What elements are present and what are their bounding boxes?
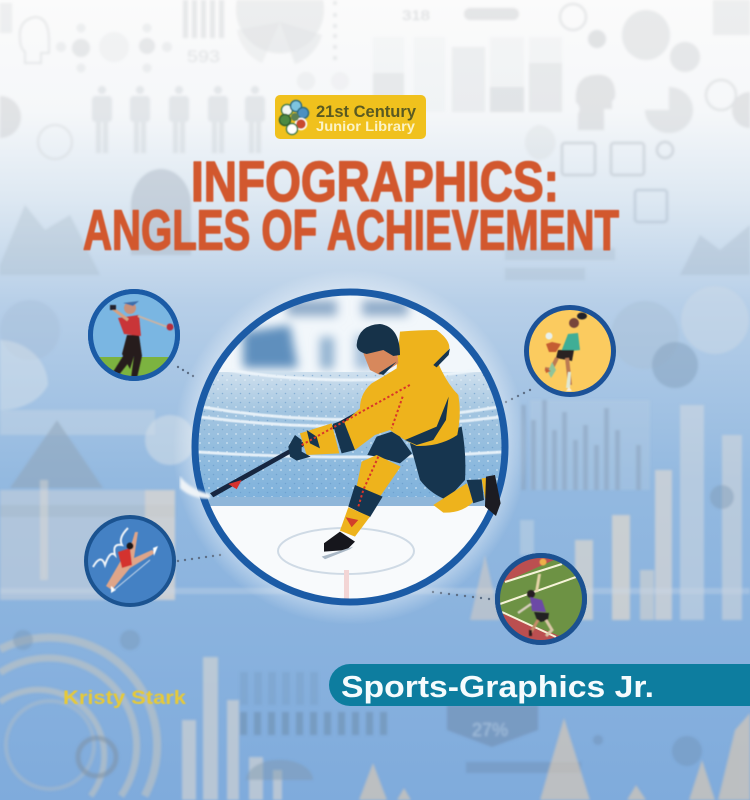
forearm and glove xyxy=(300,423,339,455)
background: top grey charts xyxy=(0,0,750,255)
stands xyxy=(190,372,510,502)
face xyxy=(363,345,398,375)
ice xyxy=(208,497,486,506)
background: bottom shapes xyxy=(0,630,750,800)
background: bottom shapes: 27% xyxy=(472,720,508,740)
logo text: Junior Library: Junior Library xyxy=(316,118,415,134)
circle border xyxy=(195,292,505,602)
ice markings xyxy=(278,528,414,574)
ribbon xyxy=(93,528,128,567)
background: mid left shapes xyxy=(0,205,195,600)
golfer figure xyxy=(110,301,174,378)
logo badge xyxy=(275,95,426,139)
golfer icon circle xyxy=(88,289,180,387)
main circle: hockey scene xyxy=(180,288,510,611)
series banner xyxy=(329,664,750,706)
title line 1: INFOGRAPHICS: xyxy=(191,150,559,214)
sleeve band xyxy=(333,420,355,453)
connector dots xyxy=(177,366,531,600)
angle dotted lines xyxy=(302,384,412,507)
volleyball icon circle xyxy=(524,305,616,397)
background: mid right shapes xyxy=(0,225,750,620)
stadium lights xyxy=(243,300,408,369)
white stick blade xyxy=(180,476,211,499)
tennis ball xyxy=(540,558,546,566)
connector: golf xyxy=(177,366,194,377)
skate xyxy=(324,532,355,552)
gymnast icon circle xyxy=(84,515,176,607)
author name: Kristy Stark xyxy=(63,688,186,709)
connector: tennis xyxy=(432,591,490,600)
tennis icon circle xyxy=(490,545,588,660)
title xyxy=(83,150,619,262)
stick xyxy=(210,410,362,497)
tennis player figure xyxy=(535,574,541,592)
connector: volleyball xyxy=(505,389,531,403)
gymnast figure xyxy=(106,532,155,590)
front leg xyxy=(357,455,401,497)
banner text: Sports-Graphics Jr. xyxy=(341,669,654,704)
volleyball player figure xyxy=(577,312,587,320)
background: top grey charts: 318 xyxy=(402,7,430,23)
icon: flower logo xyxy=(280,100,308,134)
hockey player xyxy=(210,324,501,559)
connector: gymnast xyxy=(177,554,221,562)
back leg xyxy=(410,427,465,500)
background: top grey charts: 593 xyxy=(187,47,220,66)
logo text: 21st Century: 21st Century xyxy=(316,102,417,121)
helmet xyxy=(357,324,400,356)
main circle glow xyxy=(172,269,528,625)
jersey body xyxy=(343,330,460,450)
stadium xyxy=(198,296,502,598)
background: row of people figures xyxy=(92,86,265,153)
